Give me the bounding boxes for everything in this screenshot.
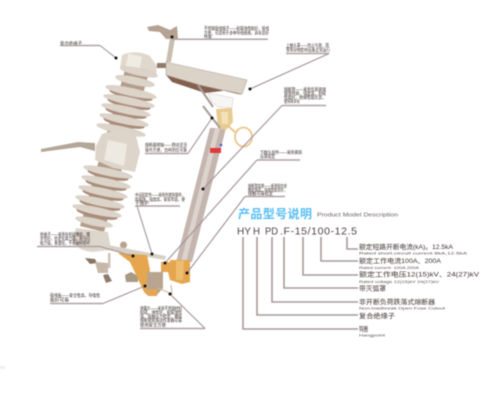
callout: fuse link (135, 192, 185, 256)
rated breaking current (359, 242, 468, 256)
callout: arc chamber: 上触头罩——防止鸟兽、雨 (286, 42, 329, 49)
model code: .F-15/100-12.5 (280, 226, 357, 238)
cutout type: Non-loadbreak Open Fuse Cutout (359, 306, 446, 310)
callout: left hinge: 能力强，重量轻，不易破碎损坏 (40, 240, 90, 246)
insulator: composite post (72, 52, 158, 252)
callout: pull ring (202, 86, 327, 190)
top terminal (147, 25, 178, 68)
upper contact housing (166, 62, 247, 95)
callout: fuse link: 于维护 (135, 200, 150, 206)
hangpost (359, 324, 386, 338)
callout: fuse link: 中间固定件——采用热镀锌钢件， (135, 192, 185, 198)
callout: left hinge: 水性好，抗老化能力强，耐污闪 (40, 235, 90, 242)
callout: top terminal: 方便，可适用于多种导线规格，具有良好 (204, 30, 269, 36)
rated current: Rated current: 100A 200A (359, 266, 420, 270)
callout: left hinge: 绝缘子——采用有机硅橡胶，憎 (40, 231, 90, 238)
composite insulator: 复合绝缘子 (359, 311, 396, 320)
callout: hinge bracket: 接线板——安全性高，导电性 (50, 292, 101, 299)
rated current (359, 256, 442, 270)
illustration: drop-out fuse cutout (41, 25, 252, 296)
hangpost: 钩圈 (359, 324, 368, 333)
faint mark (0, 366, 5, 369)
model leader lines (243, 237, 358, 329)
rated breaking current: Rated short-circuit current 8kA,12.5kA (359, 252, 468, 256)
callout: lower contact: 下触头组件——采用黄铜 (260, 149, 303, 156)
callout: arc chamber (248, 42, 330, 90)
rated voltage (359, 270, 480, 284)
callout: tube base: 精密铸造，导电性能良好， (248, 186, 287, 194)
callout: lower spring: 熔断管跌落动作准确可靠 (140, 317, 183, 324)
callout: tube base: 接触可靠稳定 (248, 190, 274, 197)
callout: hinge bracket (50, 284, 146, 304)
callout: insulator: 复合绝缘子 (60, 40, 83, 47)
callout: top terminal: 不锈钢接线端子——耐腐蚀性能好，接线 (204, 25, 269, 32)
rated voltage: Rated voltage 12(15)kV 24(27)kV (359, 280, 440, 284)
callout: tube base: 熔断管底座——采用铜合金 (248, 182, 287, 190)
model code (237, 226, 357, 238)
mounting bracket (41, 142, 95, 152)
white arc chute (208, 93, 233, 108)
callout: pull ring: 熔断管——采用优质玻璃 (284, 86, 327, 93)
callout: upper pivot: 熔断器转轴——转动灵活 (145, 142, 188, 148)
callout: lower spring: 使用安全方便 (140, 321, 167, 328)
callout: upper pivot (145, 116, 214, 154)
rated breaking current: 额定短路开断电流(kA)。12.5kA (359, 242, 454, 251)
callout: tube base (186, 182, 287, 274)
callout: left hinge (37, 231, 134, 258)
callout: top terminal: 性能 (204, 33, 213, 40)
callout: pull ring: 性能好，绝缘性能优良， (284, 94, 326, 101)
callout: pull ring: 钢管材质，强度高，耐候 (284, 90, 327, 97)
model code: H (253, 226, 260, 238)
callout: hinge bracket: 能好可靠 (50, 296, 70, 304)
lower brass hinge (108, 245, 190, 296)
rated voltage: 额定工作电压12(15)kV、24(27)kV (359, 270, 480, 278)
callout: lower spring: 制成，弹性好，耐腐蚀性 (140, 309, 183, 316)
callout: upper pivot: 操作方便，合闸到位可靠 (145, 146, 188, 154)
callout: pull ring: 使用寿命长 (284, 98, 300, 105)
cutout type (359, 297, 446, 310)
lower terminals (85, 242, 138, 283)
callout: lower contact: 压铸成型 (260, 153, 276, 160)
upper brass contact and pull ring (198, 85, 252, 146)
callout: insulator (60, 40, 118, 60)
product model description (237, 206, 480, 338)
callout: top terminal (170, 25, 269, 40)
model code: PD (265, 226, 278, 238)
arc hood: 带灭弧罩 (359, 284, 387, 292)
fuse tube (176, 128, 226, 262)
callout: lower contact (164, 149, 303, 264)
heading: 产品型号说明 (238, 206, 312, 221)
callout: lower spring (140, 292, 205, 328)
rated current: 额定工作电流100A、200A (359, 256, 442, 265)
model code: HY (237, 226, 251, 238)
callout: lower spring: 弹簧片——采用不锈钢材料 (140, 305, 182, 312)
callout: lower spring: 强，接触压力稳定，确保 (140, 313, 183, 320)
cutout type: 非开断负荷跌落式熔断器 (359, 297, 436, 306)
heading english: Product Model Description (317, 212, 398, 218)
callout: fuse link: 防腐蚀，强度高，安装牢固，便 (135, 196, 185, 203)
callout: arc chamber: 雪等异物影响设备正常运行 (286, 46, 330, 54)
hangpost: Hangpoint (359, 334, 386, 338)
